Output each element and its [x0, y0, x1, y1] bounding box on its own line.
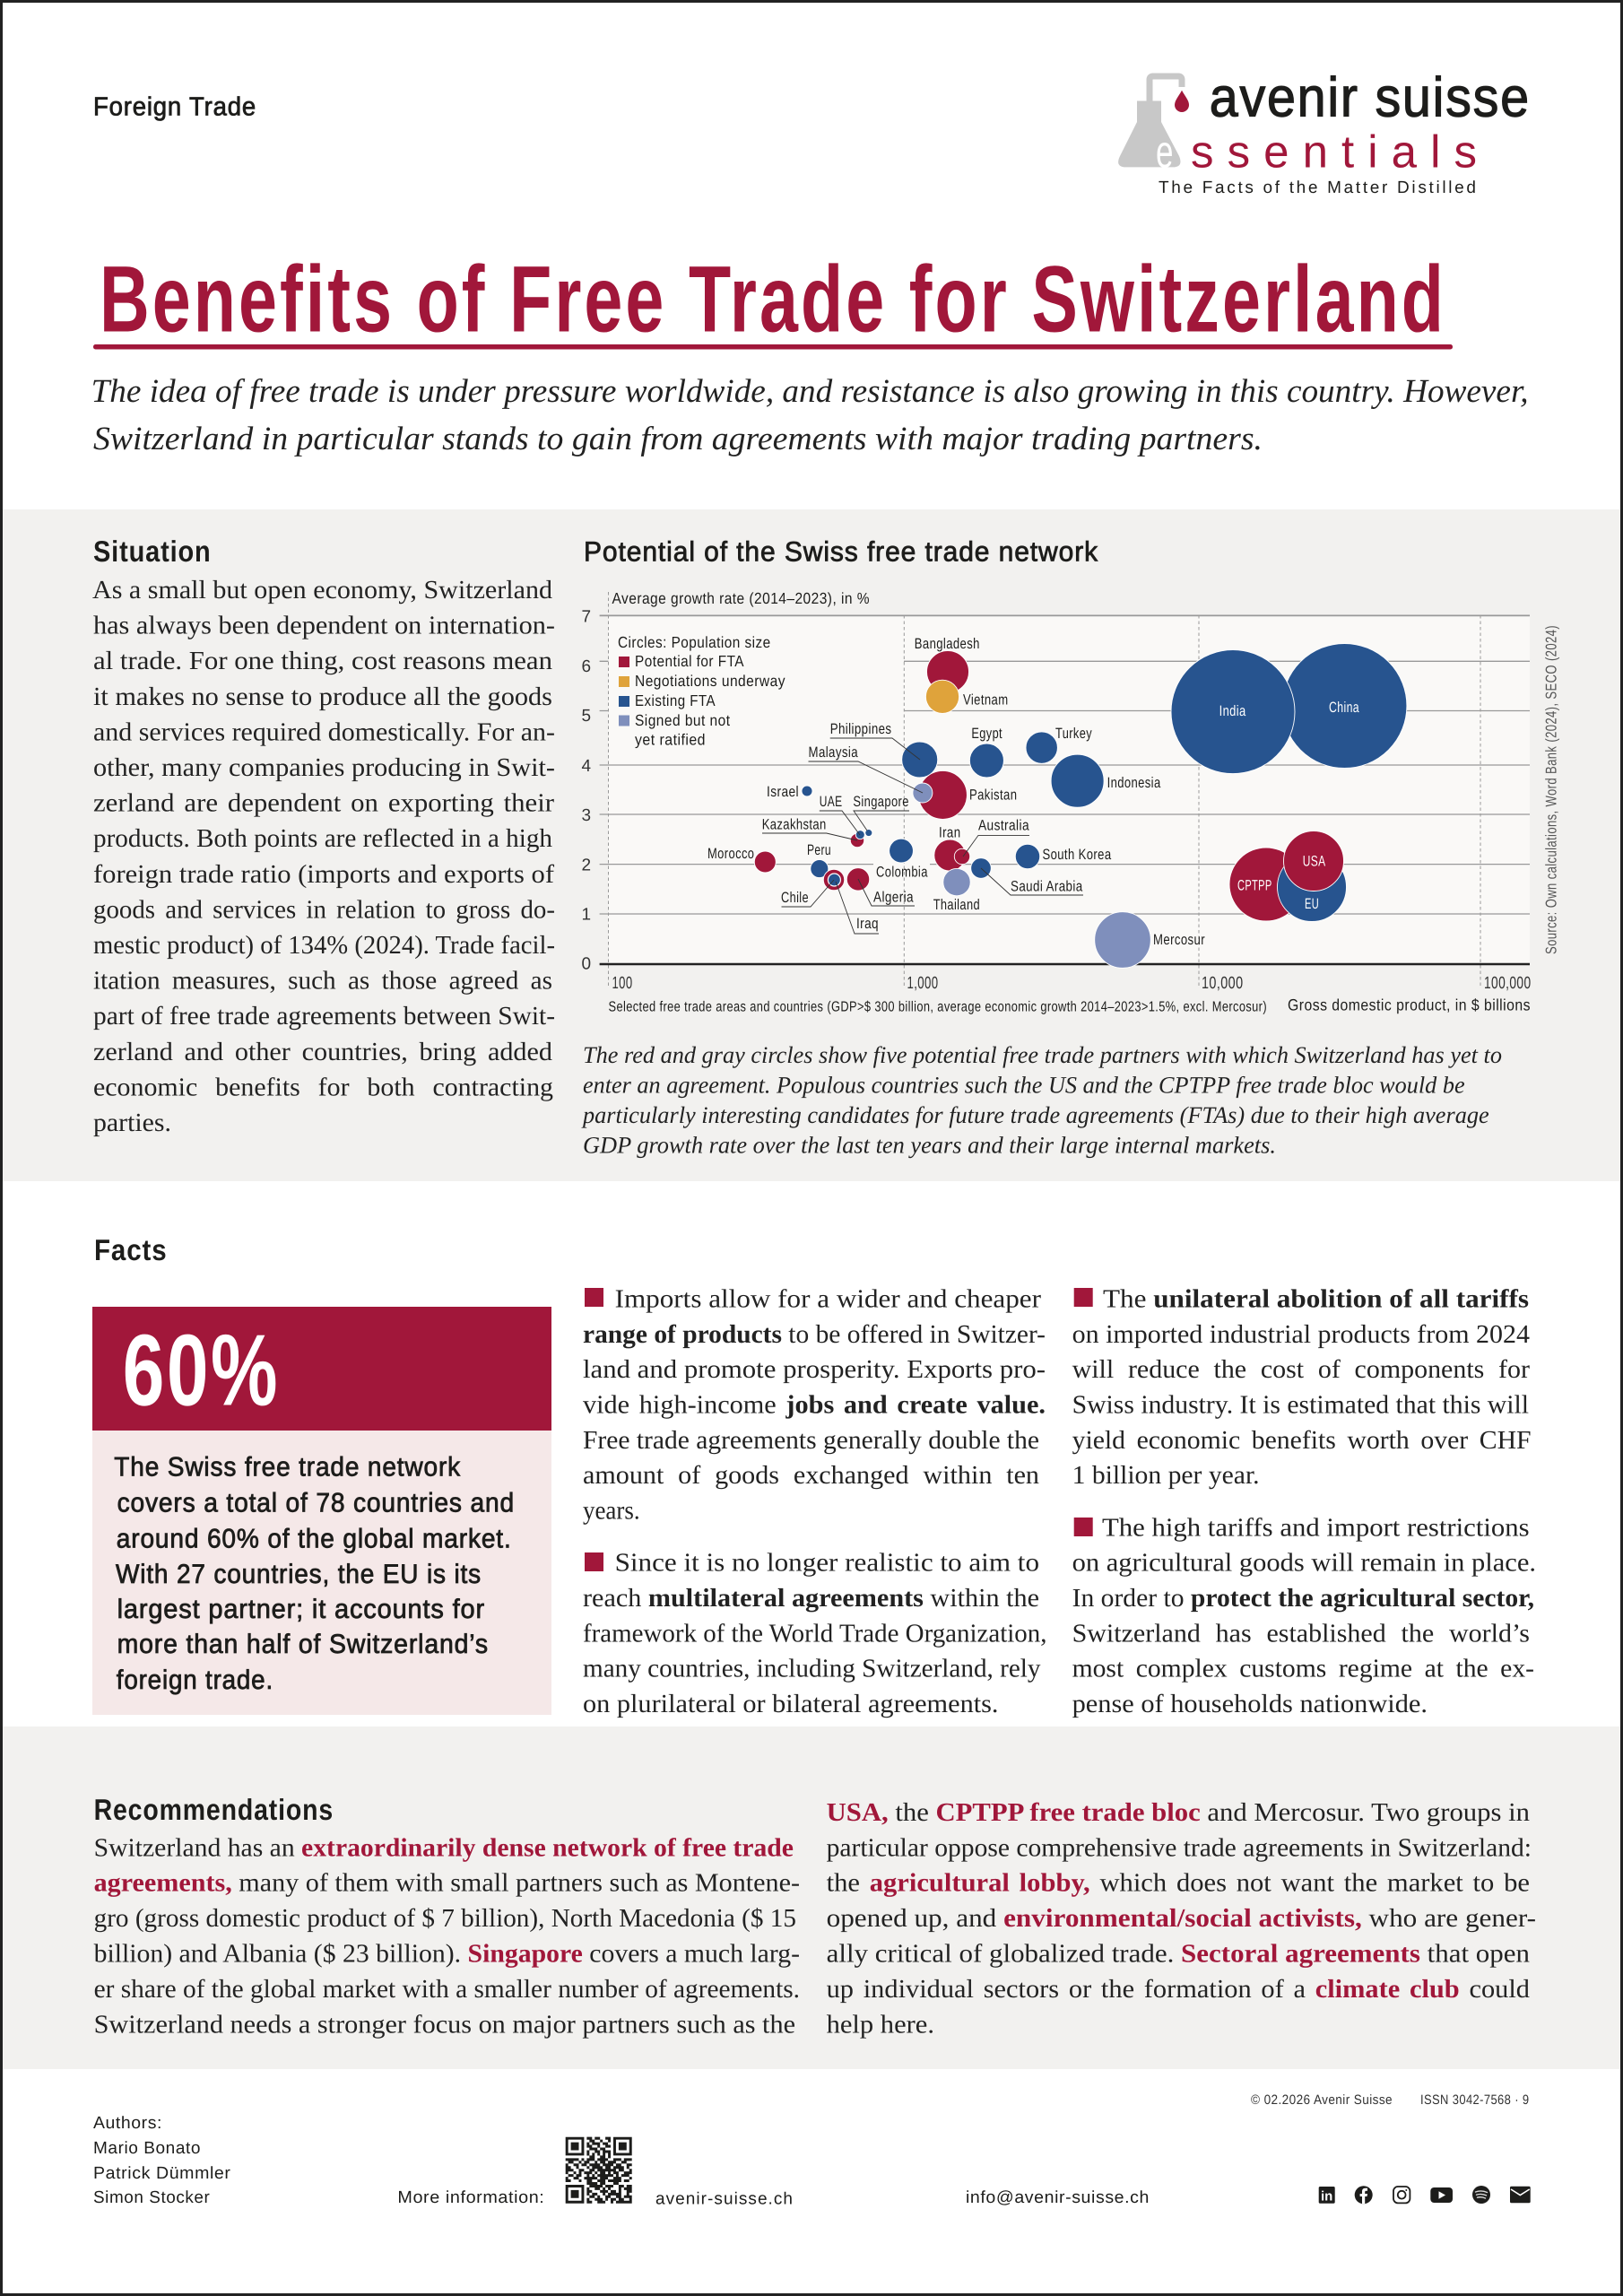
icon: Instagram [1393, 2187, 1410, 2203]
bubble: China: China [1329, 700, 1359, 716]
text block: recommendations left column: agreements, many of them with small partners such as Montene- [94, 1869, 800, 1898]
text block: imports: Imports allow for a wider and cheaper [615, 1284, 1041, 1313]
icon: Facebook [1355, 2186, 1373, 2204]
plot background [608, 615, 1530, 964]
icon: email [1510, 2187, 1531, 2203]
y axis tick labels: 5 [581, 707, 592, 726]
bubble: Mercosur: Mercosur [1153, 932, 1205, 948]
bubble: India [1171, 650, 1295, 774]
text block: recommendations right column: opened up, and environmental/social activists, who are gener- [827, 1904, 1536, 1933]
bullet [1074, 1518, 1093, 1536]
text block: imports: amount of goods exchanged within ten [583, 1461, 1040, 1490]
bubble: Vietnam [925, 680, 1008, 713]
legend: Existing FTA [635, 691, 716, 709]
bubble: Egypt: Egypt [971, 726, 1002, 742]
logo: avenir suisse essentials: e [1156, 126, 1173, 177]
bubble: Singapore: Singapore [853, 794, 909, 810]
text block: multilateral agreements: many countries, including Switzerland, rely [583, 1655, 1041, 1683]
text block: situation body: itation measures, such as those agreed as [93, 967, 552, 996]
facts column 2 [1072, 1284, 1536, 1718]
subtitle [91, 373, 1529, 457]
bubble: Turkey [1026, 726, 1092, 763]
bubble: South Korea: South Korea [1042, 847, 1112, 863]
y axis title: Average growth rate (2014–2023), in % [612, 589, 870, 607]
legend: Signed but not [635, 711, 730, 729]
bubble: EU: EU [1305, 896, 1319, 912]
bubble: Colombia: Colombia [876, 865, 928, 881]
text block: situation body: economic benefits for both contracting [93, 1073, 553, 1101]
bullet [585, 1288, 603, 1307]
chart footnote: Selected free trade areas and countries (GDP>$ 300 billion, average economic growth 2014–2023>1.5%, excl. Mercosur) [608, 999, 1267, 1015]
legend [618, 633, 785, 749]
chart caption: particularly interesting candidates for future trade agreements (FTAs) due to their high average [581, 1101, 1489, 1128]
text block: situation body: As a small but open economy, Switzerland [92, 576, 553, 604]
text block: agricultural protection: on agricultural goods will remain in place. [1072, 1549, 1536, 1578]
icon: Spotify [1472, 2186, 1490, 2204]
more information label: More information: [397, 2188, 544, 2207]
text block: multilateral agreements: on plurilateral or bilateral agreements. [583, 1690, 999, 1718]
text block: situation body: products. Both points are reflected in a high [93, 824, 552, 853]
bubble: Colombia [876, 839, 928, 881]
text block: situation body: other, many companies producing in Swit- [93, 753, 555, 782]
bubble: Egypt [969, 726, 1003, 778]
text block: multilateral agreements: framework of the World Trade Organization, [583, 1619, 1047, 1648]
bubble: Iran [934, 825, 966, 871]
text block: imports: years. [583, 1496, 640, 1525]
bubble: Australia: Australia [978, 818, 1029, 834]
callout text: The Swiss free trade network [114, 1453, 461, 1483]
bubble: Algeria [846, 868, 915, 906]
bubble: Bangladesh: Bangladesh [915, 636, 980, 652]
authors: Authors: [93, 2114, 162, 2133]
bubble: Iraq [823, 869, 879, 932]
x axis tick labels: 1,000 [907, 974, 938, 993]
authors: Mario Bonato [93, 2139, 201, 2158]
facts column 1 [583, 1284, 1047, 1718]
bubble: Indonesia [1051, 754, 1161, 807]
copyright and ISSN: © 02.2026 Avenir Suisse [1251, 2092, 1393, 2108]
panel: facts [92, 1233, 1536, 1718]
y axis tick labels: 1 [581, 906, 592, 925]
section label: Foreign Trade: Foreign Trade [93, 93, 256, 122]
bubble: Mercosur [1095, 912, 1205, 968]
text block: situation body: foreign trade ratio (imports and exports of [93, 860, 554, 889]
footer [93, 2092, 1531, 2209]
text block: situation body: parties. [93, 1109, 171, 1137]
text block: recommendations left column: billion) and Albania ($ 23 billion). Singapore covers a much larg- [94, 1940, 800, 1969]
callout text: largest partner; it accounts for [117, 1595, 485, 1624]
email: info@avenir-suisse.ch [966, 2188, 1150, 2207]
website: avenir-suisse.ch [655, 2190, 793, 2209]
text block: imports [583, 1284, 1046, 1525]
text block: unilateral abolition: yield economic benefits worth over CHF [1072, 1426, 1532, 1455]
text block: situation body: al trade. For one thing, cost reasons mean [93, 647, 553, 675]
text block: agricultural protection: The high tariffs and import restrictions [1102, 1514, 1530, 1543]
bubble: Turkey: Turkey [1055, 726, 1092, 742]
callout: 60% [92, 1307, 551, 1715]
text block: recommendations right column: up individual sectors or the formation of a climate club could [827, 1975, 1531, 2004]
text block: unilateral abolition: The unilateral abolition of all tariffs [1103, 1284, 1529, 1313]
text block: unilateral abolition: will reduce the cost of components for [1072, 1355, 1530, 1384]
bubble: China [1282, 644, 1407, 768]
bubble: Malaysia [809, 744, 933, 803]
y axis tick labels: 6 [581, 657, 592, 676]
y axis tick labels: 3 [581, 806, 592, 825]
y axis tick labels: 2 [581, 857, 592, 875]
subtitle: The idea of free trade is under pressure worldwide, and resistance is also growing in this country. However, [91, 373, 1529, 410]
y axis tick labels [581, 608, 592, 974]
callout text: more than half of Switzerland’s [117, 1630, 489, 1659]
callout text: around 60% of the global market. [117, 1525, 512, 1553]
panel: situation background [0, 509, 1623, 1181]
text block: situation body [92, 576, 555, 1137]
bubble: Morocco: Morocco [707, 846, 754, 862]
bubble: Iran: Iran [939, 825, 961, 841]
heading: Facts: Facts [94, 1233, 167, 1266]
bubble: Pakistan [918, 770, 1017, 819]
text block: recommendations right column: ally critical of globalized trade. Sectoral agreements that open [827, 1940, 1531, 1969]
title underline [93, 344, 1453, 350]
bubble: Saudi Arabia: Saudi Arabia [1011, 879, 1083, 895]
text block: unilateral abolition: on imported industrial products from 2024 [1072, 1320, 1531, 1349]
logo: avenir suisse essentials: avenir suisse [1210, 66, 1531, 129]
legend: Negotiations underway [635, 672, 785, 690]
copyright and ISSN [1251, 2092, 1530, 2108]
text block: multilateral agreements [583, 1549, 1047, 1718]
callout text [114, 1453, 515, 1695]
y axis tick labels: 4 [581, 757, 592, 776]
logo: avenir suisse essentials: ssentials [1191, 126, 1477, 177]
bubble: Algeria: Algeria [873, 890, 914, 906]
text block: unilateral abolition [1072, 1284, 1532, 1490]
bubble: Kazakhstan [762, 817, 864, 848]
icon: LinkedIn [1319, 2187, 1335, 2205]
bubble: Philippines: Philippines [830, 721, 891, 737]
bubble: Vietnam: Vietnam [963, 692, 1008, 709]
text block: recommendations left column: Switzerland needs a stronger focus on major partners such as the [94, 2011, 795, 2039]
bubble: Chile: Chile [781, 890, 809, 906]
bubble: UAE [820, 794, 864, 839]
bubble: Pakistan: Pakistan [969, 787, 1017, 803]
x axis tick labels: 100 [612, 974, 633, 993]
text block: imports: land and promote prosperity. Exports pro- [583, 1355, 1046, 1384]
logo: avenir suisse essentials: The Facts of the Matter Distilled [1159, 178, 1476, 197]
subtitle: Switzerland in particular stands to gain from agreements with major trading partners. [93, 421, 1263, 457]
text block: situation body: part of free trade agreements between Swit- [93, 1002, 555, 1031]
panel: recommendations [0, 1726, 1623, 2069]
bubble: Peru: Peru [807, 842, 831, 858]
heading: Recommendations: Recommendations [94, 1793, 334, 1826]
x axis title: Gross domestic product, in $ billions [1288, 996, 1531, 1013]
chart caption: GDP growth rate over the last ten years and their large internal markets. [583, 1132, 1276, 1159]
text block: unilateral abolition: Swiss industry. It is estimated that this will [1072, 1390, 1529, 1419]
bubble: Thailand [933, 868, 980, 913]
text block: multilateral agreements: reach multilateral agreements within the [583, 1584, 1039, 1613]
text block: recommendations right column: help here. [827, 2011, 934, 2039]
bubble: USA: USA [1303, 854, 1325, 870]
big number: 60% [123, 1313, 280, 1426]
text block: agricultural protection: Switzerland has established the world’s [1072, 1619, 1530, 1648]
text block: imports: range of products to be offered in Switzer- [583, 1320, 1046, 1349]
text block: recommendations right column: the agricultural lobby, which does not want the market to be [827, 1869, 1530, 1898]
text block: recommendations left column: Switzerland has an extraordinarily dense network of free trade [94, 1833, 794, 1862]
text block: agricultural protection: In order to protect the agricultural sector, [1072, 1584, 1534, 1613]
logo: avenir suisse essentials [1118, 66, 1531, 197]
text block: recommendations right column [827, 1798, 1536, 2039]
text block: agricultural protection: pense of households nationwide. [1072, 1690, 1428, 1718]
legend: Circles: Population size [618, 633, 771, 651]
text block: imports: vide high-income jobs and create value. [583, 1390, 1046, 1419]
bubble: EU [1277, 852, 1347, 922]
text block: multilateral agreements: Since it is no longer realistic to aim to [615, 1549, 1039, 1578]
text block: recommendations right column: particular oppose comprehensive trade agreements in Switzerland: [827, 1833, 1532, 1862]
callout text: With 27 countries, the EU is its [116, 1560, 482, 1589]
bubble: Israel: Israel [767, 784, 799, 800]
bullet [585, 1552, 603, 1571]
callout text: covers a total of 78 countries and [117, 1489, 515, 1518]
bubble: Morocco [707, 846, 776, 873]
text block: situation body: zerland and other countries, bring added [93, 1038, 553, 1066]
text block: situation body: it makes no sense to produce all the goods [93, 683, 552, 711]
text block: recommendations right column: USA, the CPTPP free trade bloc and Mercosur. Two groups in [827, 1798, 1531, 1827]
authors: Patrick Dümmler [93, 2164, 231, 2183]
text block: situation body: goods and services in relation to gross do- [93, 895, 555, 924]
authors [93, 2114, 231, 2207]
y axis tick labels: 0 [581, 955, 592, 974]
x axis tick labels: 100,000 [1484, 974, 1532, 993]
bubble: Bangladesh [915, 636, 980, 692]
chart: potential of the Swiss free trade network [581, 536, 1560, 1015]
QR code [566, 2137, 632, 2204]
text block: recommendations left column: er share of the global market with a smaller number of agreements. [94, 1975, 800, 2004]
icon: LinkedIn: in [1321, 2188, 1332, 2205]
bubble: Chile [781, 874, 879, 934]
chart caption [581, 1041, 1502, 1159]
bubble: Indonesia: Indonesia [1107, 775, 1161, 791]
chart title: Potential of the Swiss free trade network [584, 536, 1098, 568]
text block: situation body: zerland are dependent on exporting their [93, 789, 554, 818]
bubble: Thailand: Thailand [933, 897, 980, 913]
text block: situation body: mestic product) of 134% (2024). Trade facil- [93, 931, 555, 960]
callout text: foreign trade. [117, 1665, 273, 1695]
text block: unilateral abolition: 1 billion per year. [1072, 1461, 1260, 1490]
bubble: USA [1284, 831, 1343, 891]
source note: Source: Own calculations, Word Bank (2024), SECO (2024) [1543, 625, 1560, 954]
text block: situation body: and services required domestically. For an- [93, 718, 555, 746]
bubble: Peru [807, 842, 831, 878]
bubble: Malaysia: Malaysia [809, 744, 858, 761]
text block: recommendations left column [94, 1833, 800, 2039]
x axis tick labels: 10,000 [1202, 974, 1243, 993]
bubble: Philippines [830, 721, 938, 778]
legend: Potential for FTA [635, 652, 744, 670]
bubble: CPTPP: CPTPP [1237, 877, 1272, 893]
icon: YouTube [1430, 2187, 1453, 2203]
copyright and ISSN: ISSN 3042-7568 · 9 [1420, 2092, 1530, 2108]
text block: situation body: has always been dependent on internation- [93, 612, 555, 640]
authors: Simon Stocker [93, 2188, 210, 2207]
bullet [1074, 1288, 1093, 1307]
bubble: Australia [954, 818, 1029, 865]
legend: yet ratified [635, 731, 706, 749]
x axis tick labels [612, 974, 1532, 993]
text block: agricultural protection: most complex customs regime at the ex- [1072, 1655, 1534, 1683]
bubble: CPTPP [1229, 848, 1303, 921]
bubble: Saudi Arabia [971, 858, 1083, 895]
text block: imports: Free trade agreements generally double the [583, 1426, 1039, 1455]
bubble: UAE: UAE [820, 794, 843, 810]
text block: agricultural protection [1072, 1514, 1536, 1718]
y axis tick labels: 7 [581, 608, 592, 627]
icon: flask [1118, 76, 1189, 167]
text block: recommendations left column: gro (gross domestic product of $ 7 billion), North Macedonia ($ 15 [94, 1904, 796, 1933]
bubble: Kazakhstan: Kazakhstan [762, 817, 827, 833]
bubble: India: India [1219, 703, 1246, 719]
bubble: Singapore [853, 794, 909, 837]
chart caption: enter an agreement. Populous countries such the US and the CPTPP free trade bloc would be [583, 1071, 1465, 1098]
chart caption: The red and gray circles show five potential free trade partners with which Switzerland has yet to [583, 1041, 1502, 1068]
heading: Situation: Situation [93, 535, 212, 568]
panel: situation text [92, 535, 555, 1137]
bubble: South Korea [1015, 844, 1112, 869]
bubble: Iraq: Iraq [856, 916, 879, 932]
